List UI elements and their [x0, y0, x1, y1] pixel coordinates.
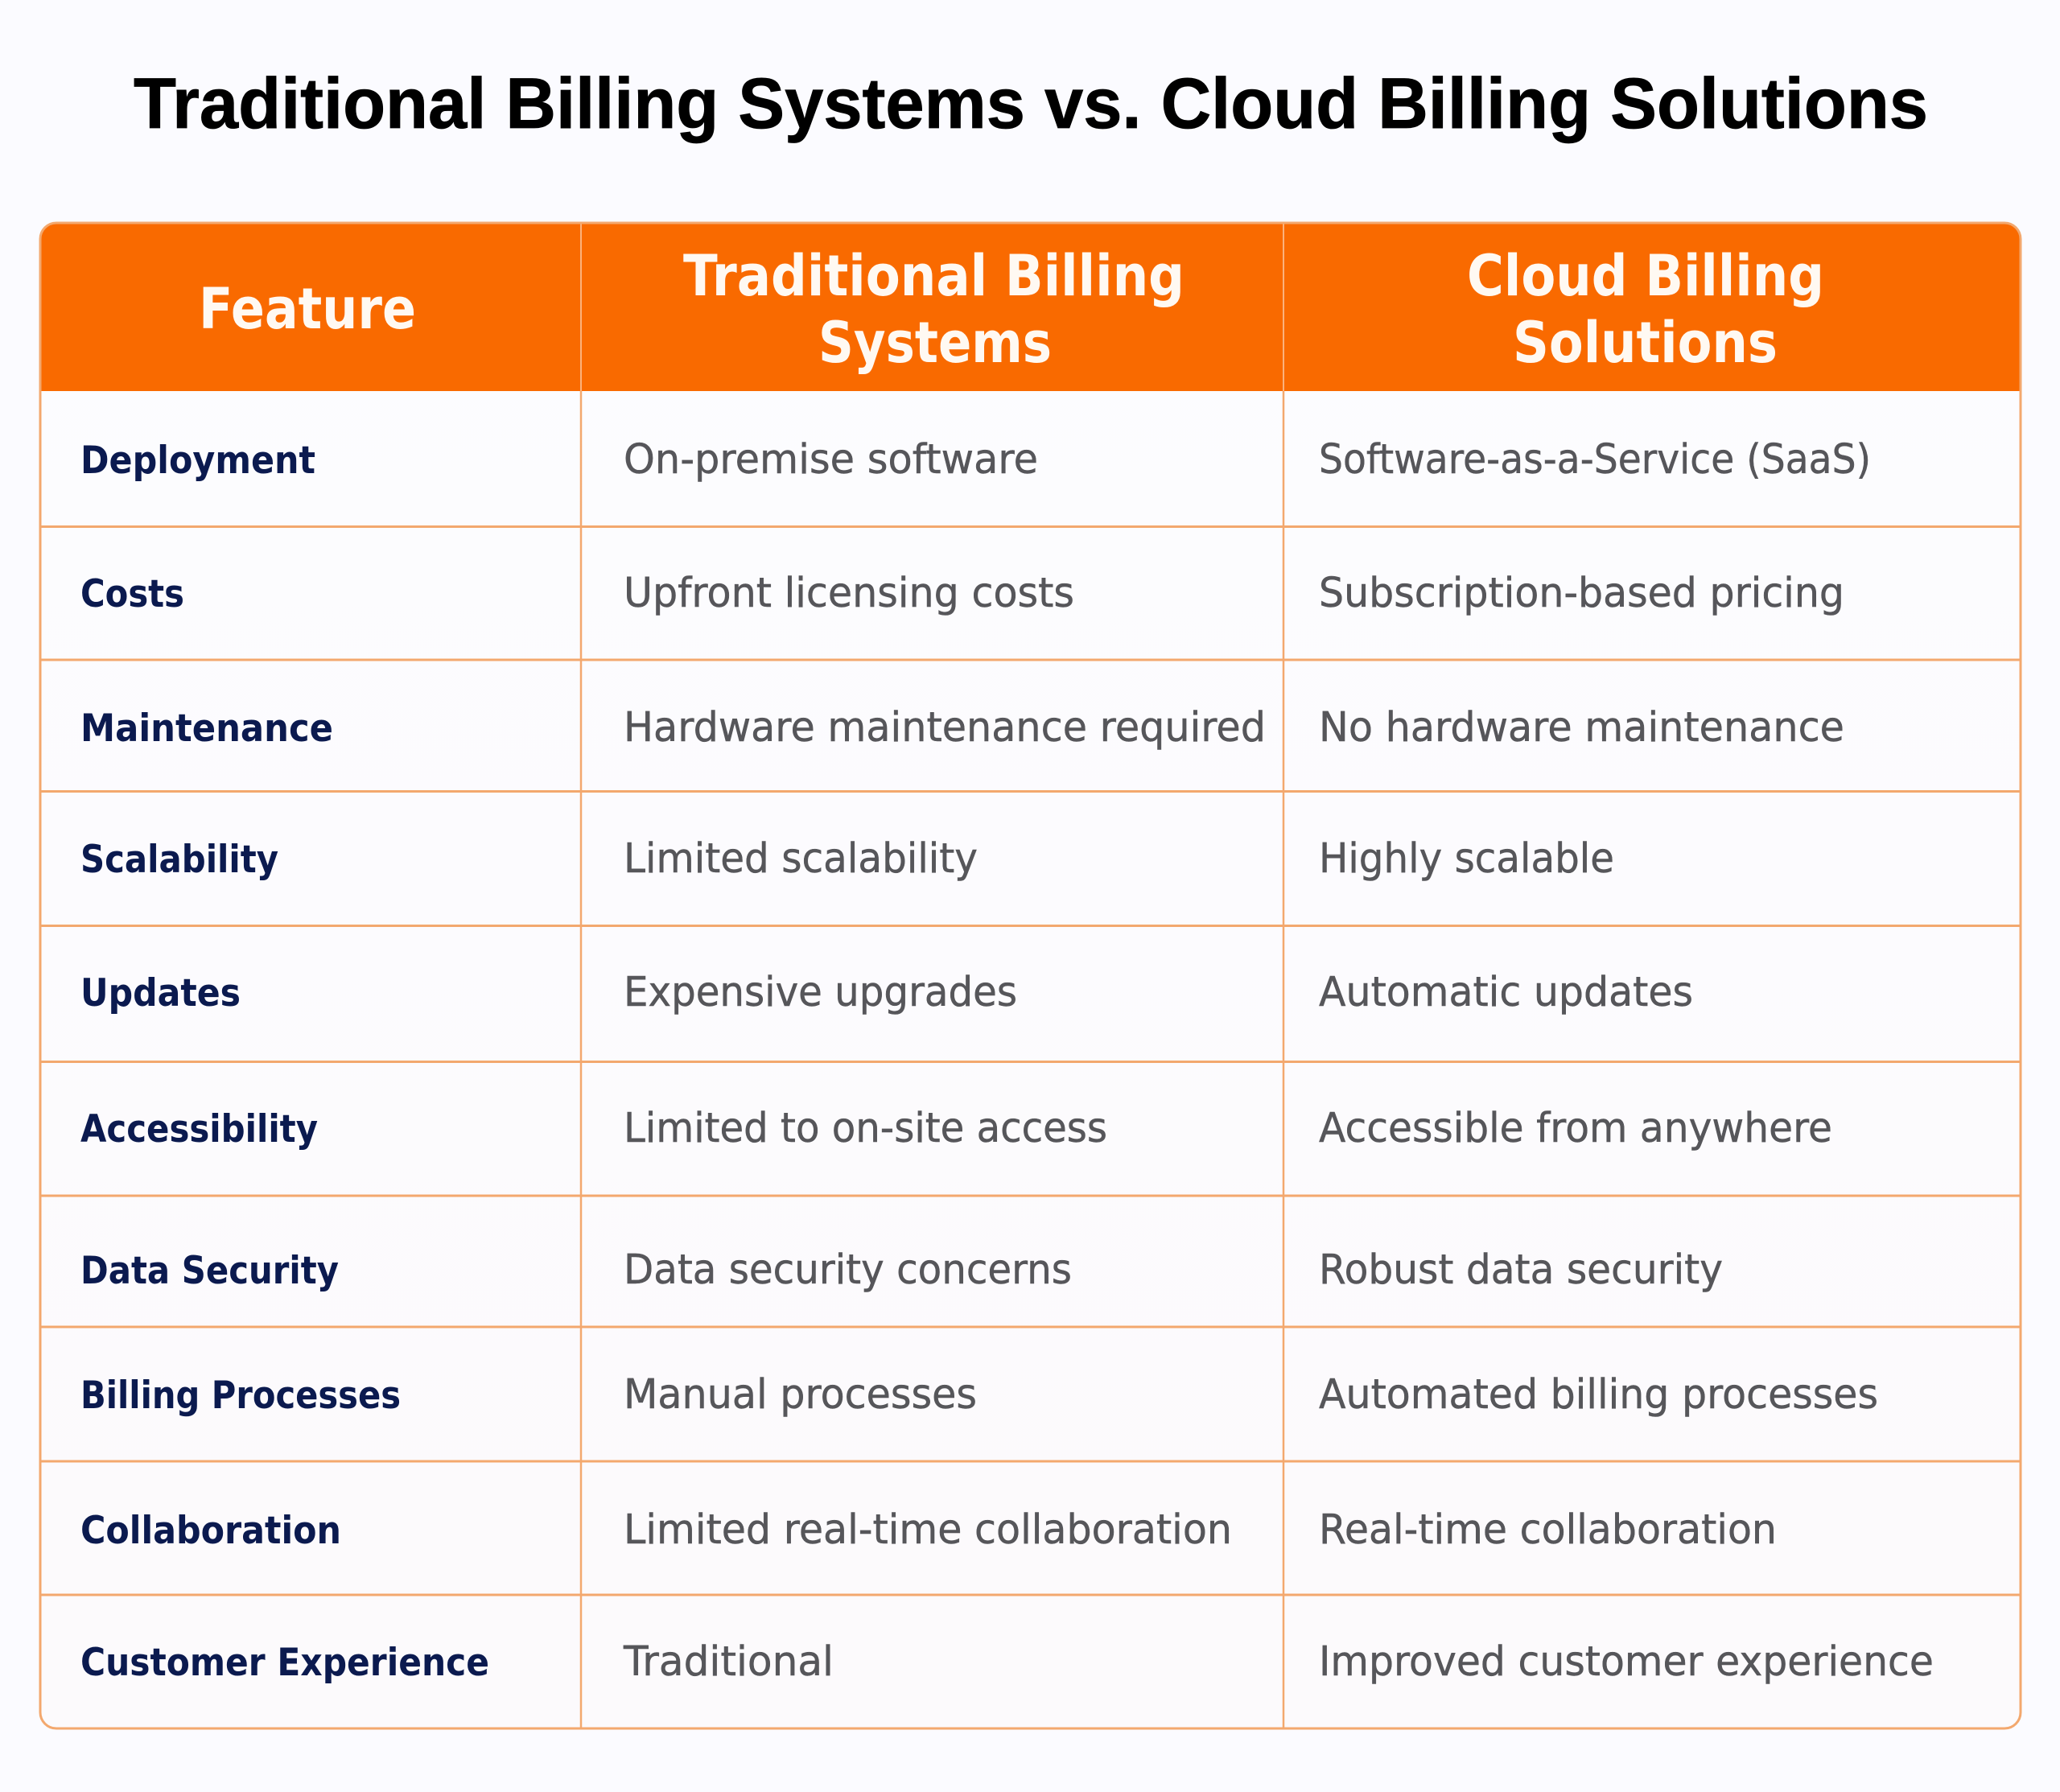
row: Data Security: Data security concerns — [624, 1246, 1072, 1294]
header: Traditional Billing Systems — [683, 243, 1184, 376]
row: Collaboration: Real-time collaboration — [1319, 1506, 1777, 1554]
row: Deployment — [80, 436, 1871, 484]
header: Cloud Billing Solutions: Cloud Billing — [1467, 243, 1824, 309]
row: Data Security: Robust data security — [1319, 1246, 1723, 1294]
header: Cloud Billing Solutions: Solutions — [1513, 310, 1778, 376]
row: Data Security: Data Security — [80, 1249, 339, 1293]
row: Collaboration: Collaboration — [80, 1509, 341, 1553]
header: Traditional Billing Systems: Systems — [818, 310, 1052, 376]
row: Customer Experience: Traditional — [623, 1638, 834, 1686]
row: Billing Processes — [80, 1371, 1878, 1419]
row: Updates: Automatic updates — [1319, 969, 1693, 1016]
row: Maintenance: Hardware maintenance required — [624, 704, 1266, 752]
row: Billing Processes: Billing Processes — [80, 1374, 401, 1418]
row: Scalability: Limited scalability — [624, 835, 978, 883]
row: Scalability: Scalability — [80, 838, 278, 882]
row: Billing Processes: Manual processes — [624, 1371, 977, 1419]
row: Costs: Subscription-based pricing — [1319, 570, 1844, 617]
row: Costs: Upfront licensing costs — [624, 570, 1074, 617]
row: Deployment: Software-as-a-Service (SaaS) — [1319, 436, 1871, 484]
row: Updates — [80, 969, 1693, 1016]
row: Updates: Expensive upgrades — [624, 969, 1017, 1016]
row: Maintenance: Maintenance — [80, 707, 333, 751]
row: Costs — [80, 570, 1844, 617]
row: Data Security — [80, 1246, 1723, 1294]
row: Customer Experience: Customer Experience — [80, 1641, 489, 1685]
header: Feature: Feature — [199, 276, 416, 342]
row: Scalability: Highly scalable — [1319, 835, 1614, 883]
row: Maintenance: No hardware maintenance — [1319, 704, 1844, 752]
row: Collaboration: Limited real-time collaboration — [624, 1506, 1232, 1554]
row: Deployment: On-premise software — [624, 436, 1038, 484]
row: Maintenance — [80, 704, 1844, 752]
row: Accessibility: Accessible from anywhere — [1319, 1105, 1832, 1152]
row: Accessibility: Limited to on-site access — [624, 1105, 1107, 1152]
table header row — [40, 223, 2021, 391]
row: Customer Experience — [80, 1638, 1934, 1686]
row: Billing Processes: Automated billing processes — [1319, 1371, 1878, 1419]
row: Scalability — [80, 835, 1614, 883]
title: Traditional Billing Systems vs. Cloud Billing Solutions — [134, 63, 1928, 143]
header: Traditional Billing Systems: Traditional Billing — [683, 243, 1184, 309]
row: Accessibility: Accessibility — [80, 1107, 318, 1151]
row: Costs: Costs — [80, 572, 184, 616]
row: Deployment: Deployment — [80, 439, 315, 483]
row: Collaboration — [80, 1506, 1777, 1554]
row: Customer Experience: Improved customer experience — [1319, 1638, 1934, 1686]
row: Updates: Updates — [80, 971, 241, 1015]
row: Accessibility — [80, 1105, 1832, 1152]
header: Cloud Billing Solutions — [1467, 243, 1824, 376]
